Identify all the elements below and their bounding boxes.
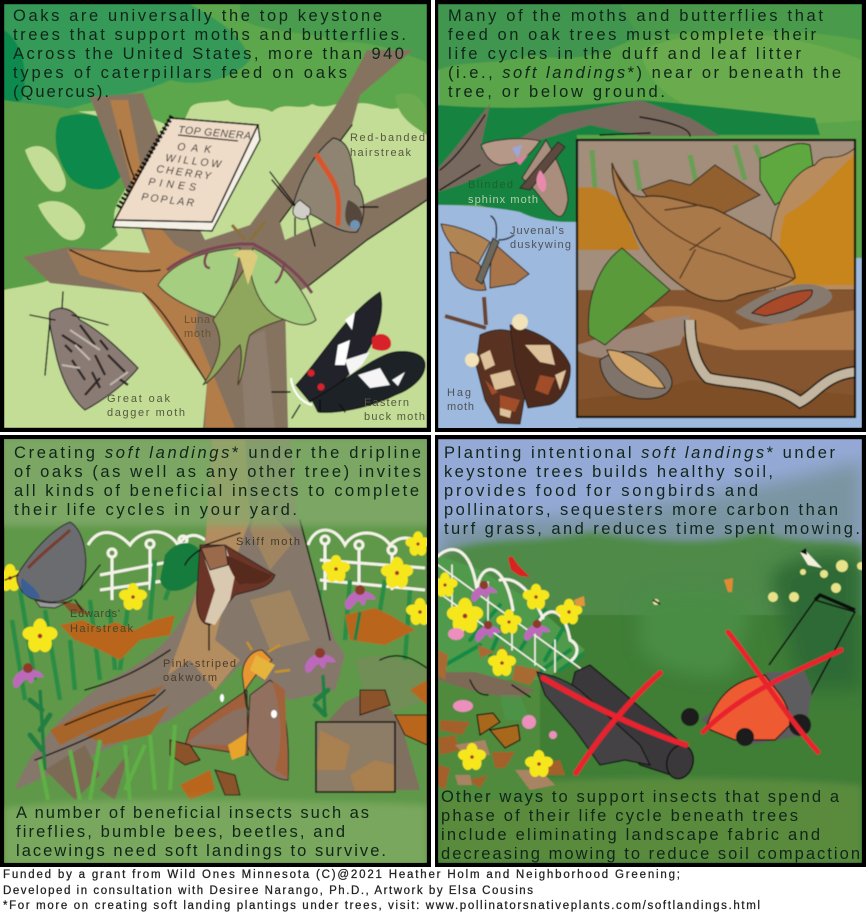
heading: planting text: pollinators, sequesters more carbon than [444,501,838,519]
icon: notebook of top genera: POPLAR [141,191,195,209]
moth: red-banded hairstreak [270,138,378,246]
flower bed [438,555,585,800]
lawn mower [681,595,855,746]
text: other ways to support insects: Other ways to support insects that spend a [441,788,840,806]
icon: notebook of top genera [113,116,260,231]
heading: oaks text: Across the United States, more than 940 [13,45,404,63]
heading: soft landings text: all kinds of beneficial insects to complete [14,482,419,500]
heading: oaks text: types of caterpillars feed on oaks [13,64,347,82]
moth: hag [445,297,570,424]
labels: panel one moth names: buck moth [364,411,425,423]
moth: luna [158,222,316,385]
heading: planting text [444,444,860,538]
moth: pink-striped oakworm [185,642,290,780]
moth: skiff [185,533,275,650]
heading: planting text: keystone trees builds healthy soil, [444,463,773,481]
labels: panel three moth names: oakworm [163,672,217,684]
labels: panel three moth names: Edwards' [70,608,120,620]
labels: panel one moth names: Great oak [107,393,170,405]
labels: panel two moth names: moth [447,401,474,413]
labels: panel one moth names: dagger moth [107,407,185,419]
footer credits [3,869,760,912]
icon: notebook of top genera: PINES [148,176,197,194]
heading: planting text: turf grass, and reduces time spent mowing. [444,520,860,538]
fence [438,549,580,672]
labels: panel two moth names: duskywing [510,239,571,251]
panel: life cycles in leaf litter [435,0,866,432]
moth: great oak dagger [30,292,138,410]
heading: oaks text: (Quercus). [13,83,109,101]
icon: notebook of top genera: WILLOW [165,152,223,171]
labels: panel three moth names: Pink-striped [163,658,236,670]
text: other ways to support insects [441,788,860,863]
oak canopy foliage [4,4,427,290]
text: other ways to support insects: include eliminating landscape fabric and [441,826,820,844]
heading: oaks text: trees that support moths and butterflies. [13,26,406,44]
landscape fabric roll [537,665,697,782]
text: beneficial insects: A number of beneficial insects such as [16,804,369,822]
labels: panel one moth names: Eastern [364,397,409,409]
heading: planting text: provides food for songbirds and [444,482,758,500]
canopy foliage [438,4,862,430]
labels: panel one moth names: hairstreak [350,147,412,159]
flowers [0,531,434,770]
icon: notebook of top genera: CHERRY [156,163,213,183]
labels: panel three moth names [70,536,300,684]
text: beneficial insects: fireflies, bumble bees, beetles, and [16,823,345,841]
heading: life cycles text: feed on oak trees must complete their [448,26,816,44]
labels: panel one moth names: Luna [184,314,211,326]
footer credits: Funded by a grant from Wild Ones Minnesota (C)@2021 Heather Holm and Neighborhood Greening; [3,869,680,881]
garden plants and mulch [12,543,415,700]
lawn [438,554,862,863]
panel: creating soft landings under oaks [0,435,434,867]
labels: panel one moth names: Red-banded [350,132,425,144]
moth: Edwards' hairstreak [5,522,100,610]
icon: notebook of top genera: TOP GENERA [178,124,252,142]
inset: leaf litter and pupae [577,140,855,417]
bird: goldfinch and shrub flowers [768,548,865,602]
icon: notebook of top genera: OAK [177,141,213,156]
grass foreground and text band [4,725,427,865]
garden fence [88,530,425,600]
labels: panel three moth names: Skiff moth [236,536,300,548]
footer credits: Developed in consultation with Desiree Narango, Ph.D., Artwork by Elsa Cousins [3,885,533,897]
heading: soft landings text: Creating soft landings* under the dripline [14,444,421,462]
oak trunk and roots [15,436,427,800]
labels: panel three moth names: Hairstreak [70,623,134,635]
labels: panel two moth names: Blinded [468,179,513,191]
red x: no mowing [703,632,841,752]
leaves on the ground [170,680,427,800]
labels: panel two moth names: Juvenal's [510,225,564,237]
labels: panel one moth names [107,132,425,423]
moth: blinded sphinx [481,139,568,217]
heading: life cycles text: (i.e., soft landings*) near or beneath the [448,64,841,82]
labels: panel two moth names: Hag [447,387,471,399]
oak branches [438,100,720,192]
moth: eastern buck [272,292,425,418]
red x: no fabric [543,673,686,773]
heading: life cycles text: Many of the moths and butterflies that [448,7,823,25]
heading: life cycles text [448,7,841,101]
oak tree trunk and branches [23,50,427,428]
moth: Juvenal's duskywing [441,216,529,290]
labels: panel two moth names [447,179,571,413]
text band over the trunk [0,436,431,526]
text: beneficial insects: lacewings need soft landings to survive. [16,842,386,860]
inset marker square [316,722,395,792]
heading: life cycles text: life cycles in the duff and leaf litter [448,45,802,63]
misty treeline [438,460,862,700]
heading: life cycles text: tree, or below ground. [448,83,665,101]
heading: oaks text: Oaks are universally the top keystone [13,7,382,25]
heading: soft landings text: their life cycles in your yard. [14,501,297,519]
text: other ways to support insects: decreasing mowing to reduce soil compaction [441,845,860,863]
insects: butterflies and bee [574,578,733,606]
bird: cardinal [508,556,530,577]
heading: soft landings text [14,444,421,519]
flowers [432,572,582,777]
panel: planting intentional soft landings [432,435,866,867]
heading: planting text: Planting intentional soft landings* under [444,444,836,462]
heading: oaks text [13,7,406,101]
heading: soft landings text: of oaks (as well as any other tree) invites [14,463,421,481]
panel: oaks are top keystone trees [0,0,431,432]
text: beneficial insects [16,804,386,860]
labels: panel one moth names: moth [184,328,211,340]
labels: panel two moth names: sphinx moth [468,194,538,206]
footer credits: *For more on creating soft landing plantings under trees, visit: www.pollinatorsnativeplants.com/softlandings.html [3,900,760,912]
text: other ways to support insects: phase of their life cycle beneath trees [441,807,798,825]
